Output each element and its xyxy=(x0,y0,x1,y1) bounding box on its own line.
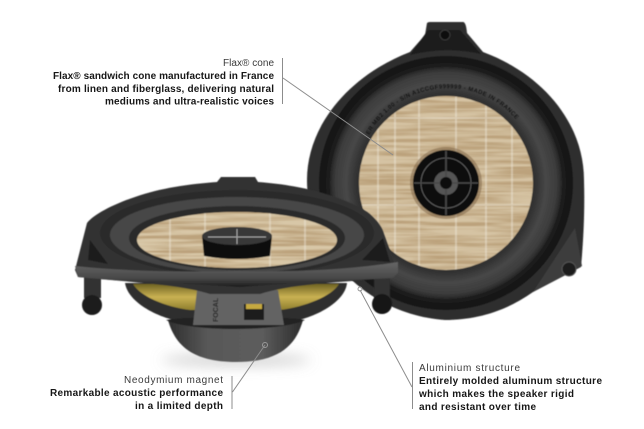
callout text: which makes the speaker rigid xyxy=(418,389,574,400)
frame xyxy=(75,177,398,294)
callout text xyxy=(418,363,602,413)
callout text: Flax® cone xyxy=(223,58,274,69)
callout: flax cone xyxy=(53,58,393,155)
callout text: Remarkable acoustic performance xyxy=(50,388,223,399)
callout text: in a limited depth xyxy=(135,401,223,412)
frame xyxy=(307,22,584,320)
neodymium magnet xyxy=(168,320,303,362)
callout text: and resistant over time xyxy=(419,402,536,413)
mounting tab top xyxy=(410,30,481,55)
right speaker, front view xyxy=(306,21,586,321)
right speaker, front view: ER MB2 1.00 - S/N A1CCGF999999 - MADE IN FRANCE xyxy=(366,84,519,134)
strut window xyxy=(244,304,264,320)
callout line xyxy=(232,345,265,409)
screw bottom right xyxy=(562,262,576,276)
callout text: Flax® sandwich cone manufactured in France xyxy=(53,71,274,82)
front frame bar xyxy=(75,262,398,287)
callout line xyxy=(360,290,412,409)
mounting corner bottom right xyxy=(533,228,582,292)
callout text xyxy=(50,375,223,412)
strut brand: FOCAL xyxy=(213,297,220,322)
callout text: Neodymium magnet xyxy=(124,375,223,386)
flax cone xyxy=(137,212,337,268)
ground shadow xyxy=(161,355,311,365)
tweeter phase plug xyxy=(410,147,482,219)
callout text xyxy=(53,58,274,108)
callout text: mediums and ultra-realistic voices xyxy=(105,96,274,108)
rubber surround xyxy=(100,190,374,276)
foot right xyxy=(372,276,392,314)
serial print on surround xyxy=(369,88,528,137)
rubber surround xyxy=(330,67,562,299)
callout text: Entirely molded aluminum structure xyxy=(419,376,602,387)
screw top xyxy=(440,30,450,40)
flax cone xyxy=(359,96,533,270)
callout: neodymium magnet xyxy=(50,342,268,412)
frame inner black ring xyxy=(319,56,573,310)
callout text: from linen and fiberglass, delivering natural xyxy=(58,84,274,95)
callout text: Aluminium structure xyxy=(419,363,520,374)
callout: aluminium structure xyxy=(358,287,602,413)
magnet marker xyxy=(262,342,268,348)
aluminium strut xyxy=(193,290,284,325)
tweeter phase plug xyxy=(202,227,272,259)
callout line xyxy=(282,58,393,155)
frame corner recesses xyxy=(88,238,390,264)
lower ring xyxy=(125,283,347,323)
structure marker xyxy=(358,287,362,291)
foot left xyxy=(82,276,102,315)
yellow basket xyxy=(133,284,339,310)
left speaker, three-quarter view xyxy=(75,177,398,365)
